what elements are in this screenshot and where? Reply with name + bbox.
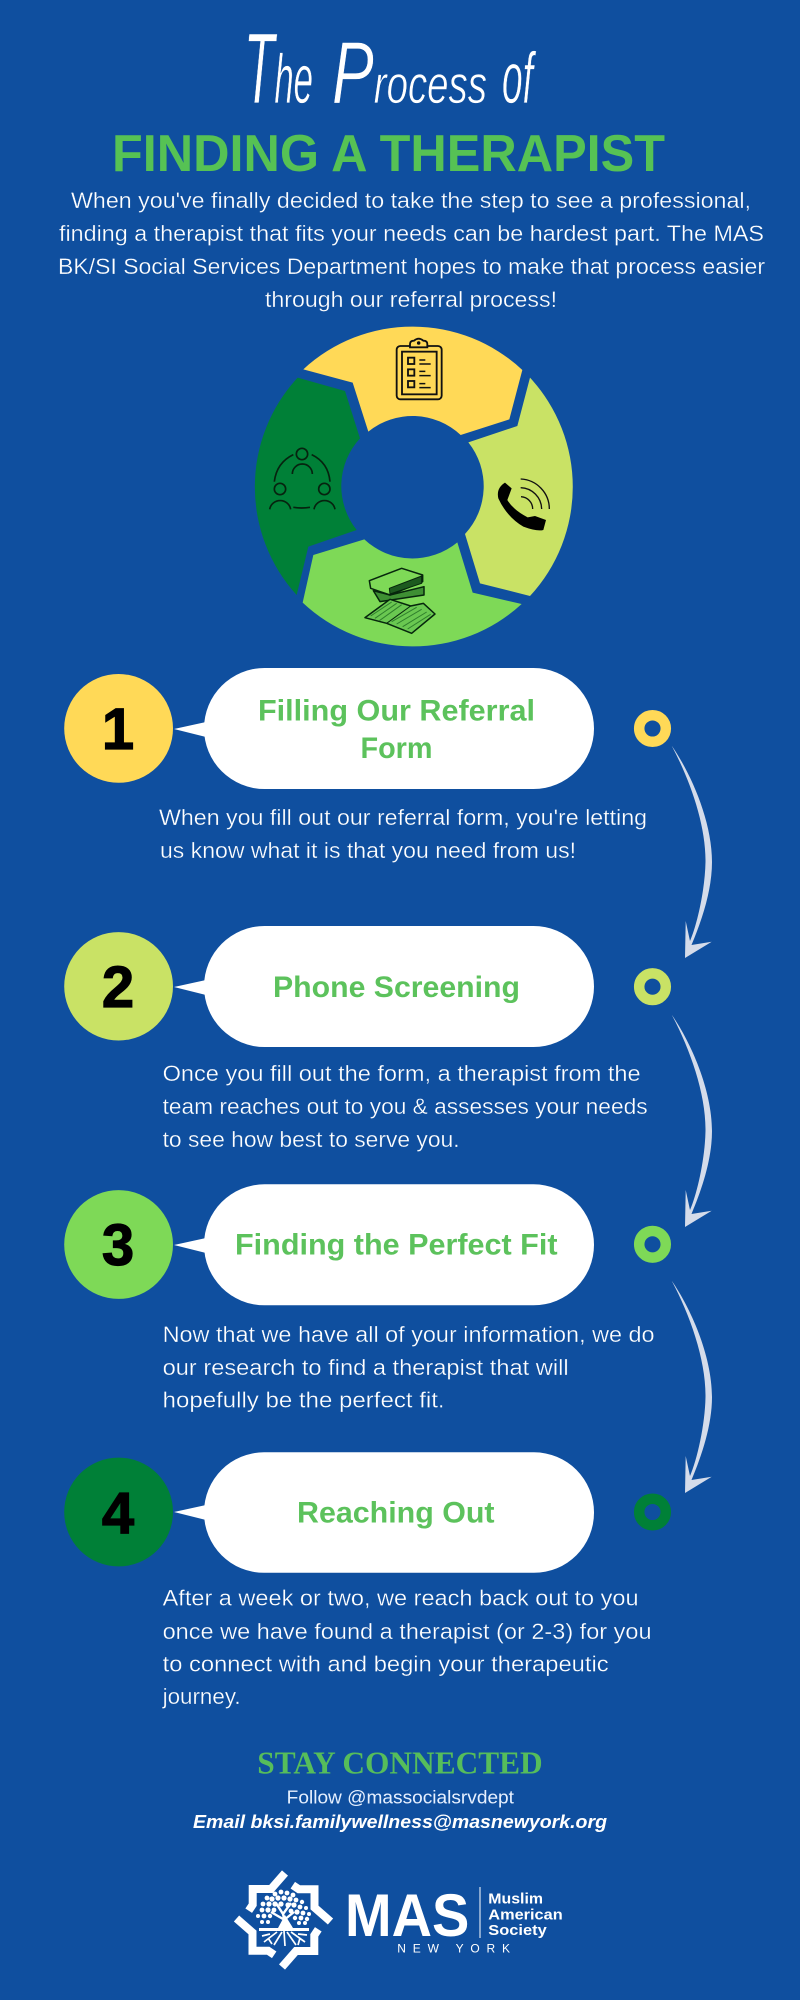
segment: dark green with people (255, 378, 360, 595)
intro paragraph (58, 188, 765, 312)
logo tagline: Society (488, 1922, 547, 1939)
intro paragraph: finding a therapist that fits your needs can be hardest part. The MAS (59, 221, 764, 246)
number badge 4: 4 (102, 1481, 134, 1546)
description 1: us know what it is that you need from us! (160, 838, 576, 863)
footer: email line: Email bksi.familywellness@masnewyork.org (193, 1812, 607, 1832)
callout pill: Filling Our Referral Form: Form (360, 732, 432, 765)
segment: yellow with clipboard (303, 327, 522, 435)
description 1 (159, 805, 647, 863)
logo tagline (488, 1890, 563, 1939)
icon: clipboard (397, 339, 442, 399)
title: script line: Process (332, 23, 487, 122)
description 3: hopefully be the perfect fit. (163, 1388, 445, 1413)
intro paragraph: through our referral process! (265, 287, 557, 312)
callout pill: Filling Our Referral Form: Filling Our Referral (258, 694, 535, 728)
description 2 (163, 1061, 648, 1152)
donut diagram (255, 327, 573, 646)
footer: stay connected heading: STAY CONNECTED (257, 1744, 543, 1780)
number badge 2 (64, 932, 173, 1040)
arrow 3 (672, 1281, 712, 1493)
step 1 (64, 668, 712, 958)
logo tagline: Muslim (488, 1890, 543, 1907)
ring marker 4 (639, 1499, 666, 1525)
number badge 4 (64, 1458, 173, 1566)
number badge 3: 3 (102, 1213, 134, 1278)
ring marker 3 (639, 1231, 666, 1258)
step 2 (64, 926, 712, 1227)
callout pill: Reaching Out (174, 1452, 594, 1573)
description 2: team reaches out to you & assesses your needs (163, 1094, 648, 1119)
description 4 (162, 1586, 652, 1709)
logo wordmark MAS: MAS (345, 1882, 469, 1949)
logo sublabel: NEW YORK (397, 1941, 510, 1955)
segment: lime with phone (465, 378, 573, 596)
number badge 1 (64, 674, 173, 783)
title: script line (244, 13, 537, 125)
description 3 (163, 1322, 655, 1413)
callout pill: Finding the Perfect Fit: Finding the Perfect Fit (235, 1228, 558, 1261)
arrow 2 (672, 1015, 712, 1227)
callout pill: Finding the Perfect Fit (174, 1184, 594, 1305)
description 3: our research to find a therapist that will (163, 1355, 569, 1380)
description 1: When you fill out our referral form, you're letting (159, 805, 647, 830)
logo tagline: American (488, 1906, 563, 1923)
number badge 1: 1 (102, 697, 134, 762)
description 4: to connect with and begin your therapeutic (163, 1652, 609, 1677)
callout pill: Filling Our Referral Form (174, 668, 594, 789)
logo emblem (236, 1873, 330, 1967)
intro paragraph: BK/SI Social Services Department hopes to make that process easier (58, 254, 765, 279)
description 4: once we have found a therapist (or 2-3) for you (163, 1619, 652, 1644)
intro paragraph: When you've finally decided to take the step to see a professional, (71, 188, 751, 213)
description 3: Now that we have all of your information, we do (163, 1322, 655, 1347)
logo (236, 1873, 563, 1967)
callout pill: Phone Screening: Phone Screening (273, 971, 520, 1004)
callout pill: Reaching Out: Reaching Out (297, 1496, 495, 1529)
ring marker 1 (639, 715, 666, 742)
number badge 3 (64, 1190, 173, 1299)
description 4: After a week or two, we reach back out to you (163, 1586, 639, 1611)
arrow 1 (672, 746, 712, 958)
ring marker 2 (639, 973, 666, 1000)
icon: phone (498, 479, 549, 530)
callout pill: Phone Screening (174, 926, 594, 1047)
description 2: to see how best to serve you. (163, 1127, 460, 1152)
step 4 (64, 1452, 666, 1709)
segment: green with books (303, 539, 522, 646)
description 2: Once you fill out the form, a therapist from the (163, 1061, 641, 1086)
footer: follow line: Follow @massocialsrvdept (287, 1787, 514, 1807)
description 4: journey. (162, 1684, 241, 1709)
title: main heading: FINDING A THERAPIST (112, 125, 665, 183)
title: script line: of (502, 39, 537, 119)
step 3 (64, 1184, 712, 1493)
number badge 2: 2 (102, 955, 134, 1020)
icon: books (365, 568, 435, 633)
icon: people in a circle (270, 448, 335, 509)
title: script line: The (244, 13, 313, 125)
